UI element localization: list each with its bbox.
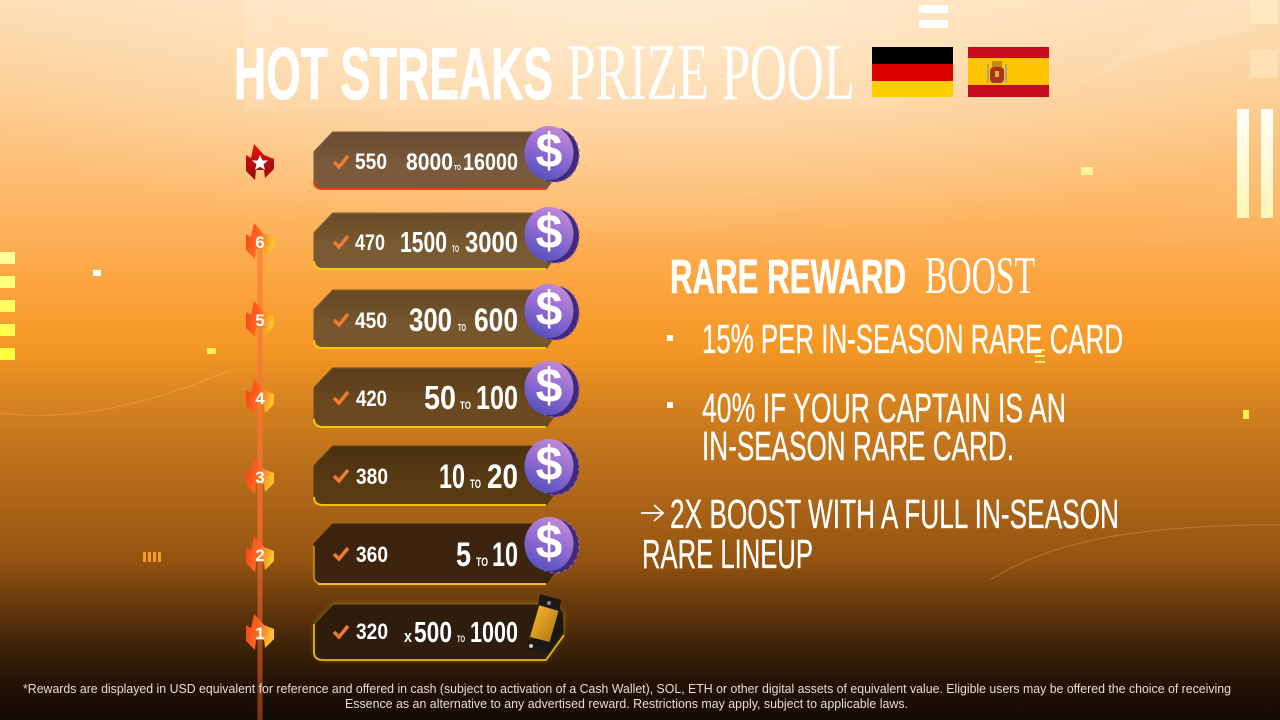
reward panel xyxy=(314,524,563,584)
reward panel: 50 xyxy=(424,379,456,416)
tier: 3 xyxy=(246,438,579,505)
reward panel: TO xyxy=(460,400,471,412)
icon: coin xyxy=(524,206,579,263)
icon: coin xyxy=(524,438,579,495)
icon: coin: $ xyxy=(536,516,563,569)
icon: flame 1: 1 xyxy=(255,624,265,643)
icon: flame 3: 3 xyxy=(255,468,265,487)
footnote: Essence as an alternative to any advertised reward. Restrictions may apply, subject to applicable laws. xyxy=(345,696,908,711)
title: HOT STREAKS xyxy=(234,34,553,115)
reward panel: 500 xyxy=(414,617,452,649)
icon: flame 4 xyxy=(246,379,274,415)
reward panel: TO xyxy=(476,555,488,569)
icon: flame 5 xyxy=(246,301,274,337)
icon: coin xyxy=(524,516,579,573)
flag: Spain xyxy=(968,47,1049,97)
icon: coin xyxy=(524,125,579,182)
reward panel xyxy=(314,447,563,505)
bullet: 40% xyxy=(667,385,1066,469)
bullet: 15% xyxy=(667,316,1123,362)
heading: RARE REWARD xyxy=(670,251,906,304)
title: PRIZE POOL xyxy=(567,29,855,117)
reward panel: 1000 xyxy=(470,617,518,649)
callout: 2x boost: RARE LINEUP xyxy=(642,531,813,577)
callout: 2x boost xyxy=(641,491,1119,577)
reward panel: 380 xyxy=(356,464,388,489)
icon: flame 6 xyxy=(246,223,274,259)
icon: coin xyxy=(524,360,579,417)
icon: flame 2: 2 xyxy=(255,546,265,565)
reward panel: 5 xyxy=(456,536,471,574)
icon: coin: $ xyxy=(536,283,563,336)
reward panel: TO xyxy=(452,244,459,254)
reward panel: 20 xyxy=(487,458,518,496)
reward panel: 300 xyxy=(409,302,452,338)
progress line xyxy=(258,245,262,720)
icon: flame 3 xyxy=(246,458,274,494)
tier: 5 xyxy=(246,283,579,348)
reward panel xyxy=(314,369,563,427)
reward panel xyxy=(314,133,563,189)
icon: flame 5: 5 xyxy=(255,311,265,330)
reward panel: 420 xyxy=(356,386,387,411)
tier: 2 xyxy=(246,516,579,584)
icon: star flame xyxy=(246,144,274,180)
reward panel: 3000 xyxy=(465,227,518,259)
icon: coin: $ xyxy=(536,360,563,413)
icon: coin: $ xyxy=(536,206,563,259)
bullet: 40%: IN-SEASON RARE CARD. xyxy=(702,423,1014,469)
tier: star xyxy=(246,125,579,189)
icon: flame 2 xyxy=(246,536,274,572)
reward panel xyxy=(314,214,563,269)
reward panel: 600 xyxy=(474,302,518,338)
reward panel: 16000 xyxy=(463,149,518,176)
icon: coin xyxy=(524,283,579,340)
reward panel xyxy=(314,291,563,348)
reward panel: x xyxy=(404,627,412,646)
flag: Germany xyxy=(872,47,953,97)
reward panel: 10 xyxy=(492,536,518,574)
icon: essence pack xyxy=(527,594,564,654)
rare reward boost panel xyxy=(641,247,1123,577)
reward panel: 320 xyxy=(356,619,388,644)
reward panel: 470 xyxy=(355,230,385,255)
bullet: 40%: 40% IF YOUR CAPTAIN IS AN xyxy=(702,385,1066,431)
reward panel xyxy=(314,604,564,660)
heading: BOOST xyxy=(925,247,1035,305)
reward panel: 8000 xyxy=(406,149,453,176)
icon: flame 4: 4 xyxy=(255,389,265,408)
icon: flame 1 xyxy=(246,614,274,650)
icon: coin: $ xyxy=(536,438,563,491)
tier: 6 xyxy=(246,206,579,269)
reward panel: 360 xyxy=(356,542,388,567)
tier: 4 xyxy=(246,360,579,427)
reward panel: TO xyxy=(454,165,461,172)
reward panel: 550 xyxy=(355,149,387,174)
decorative marks xyxy=(0,0,1278,562)
reward panel: 450 xyxy=(355,308,387,333)
reward panel: 10 xyxy=(439,458,465,496)
footnote: *Rewards are displayed in USD equivalent for reference and offered in cash (subject to activation of a Cash Wallet), SOL, ETH or other digital assets of equivalent value. Eligible users may be offered the choice of receiving xyxy=(23,681,1231,696)
reward panel: TO xyxy=(457,634,465,644)
footnote xyxy=(23,681,1231,711)
reward panel: 100 xyxy=(476,379,518,416)
reward panel: 1500 xyxy=(400,227,447,259)
reward panel: TO xyxy=(458,323,466,334)
tier: 1 xyxy=(246,594,564,660)
icon: coin: $ xyxy=(536,125,563,178)
reward panel: TO xyxy=(470,477,481,491)
icon: flame 6: 6 xyxy=(255,233,265,252)
